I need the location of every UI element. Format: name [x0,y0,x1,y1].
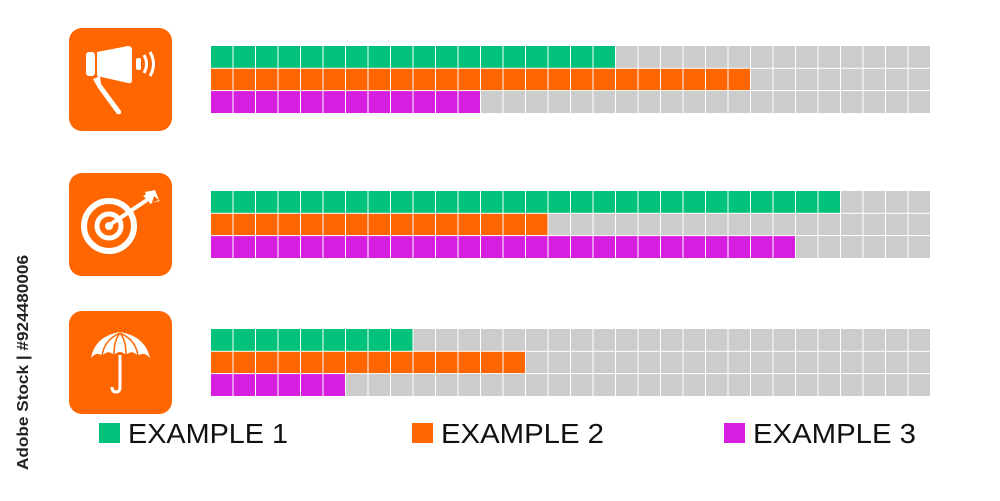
legend: example 3: EXAMPLE 3 [753,418,916,449]
legend: example 2: EXAMPLE 2 [441,418,604,449]
icon: target [69,173,172,276]
legend: example 1: EXAMPLE 1 [128,418,288,449]
watermark side text: Adobe Stock | #924480006 [15,255,32,470]
icon: umbrella [69,311,172,414]
icon: megaphone [69,28,172,131]
chart: group 1 [210,46,931,113]
chart: group 2 [210,191,931,258]
chart: group 3 [210,329,931,396]
